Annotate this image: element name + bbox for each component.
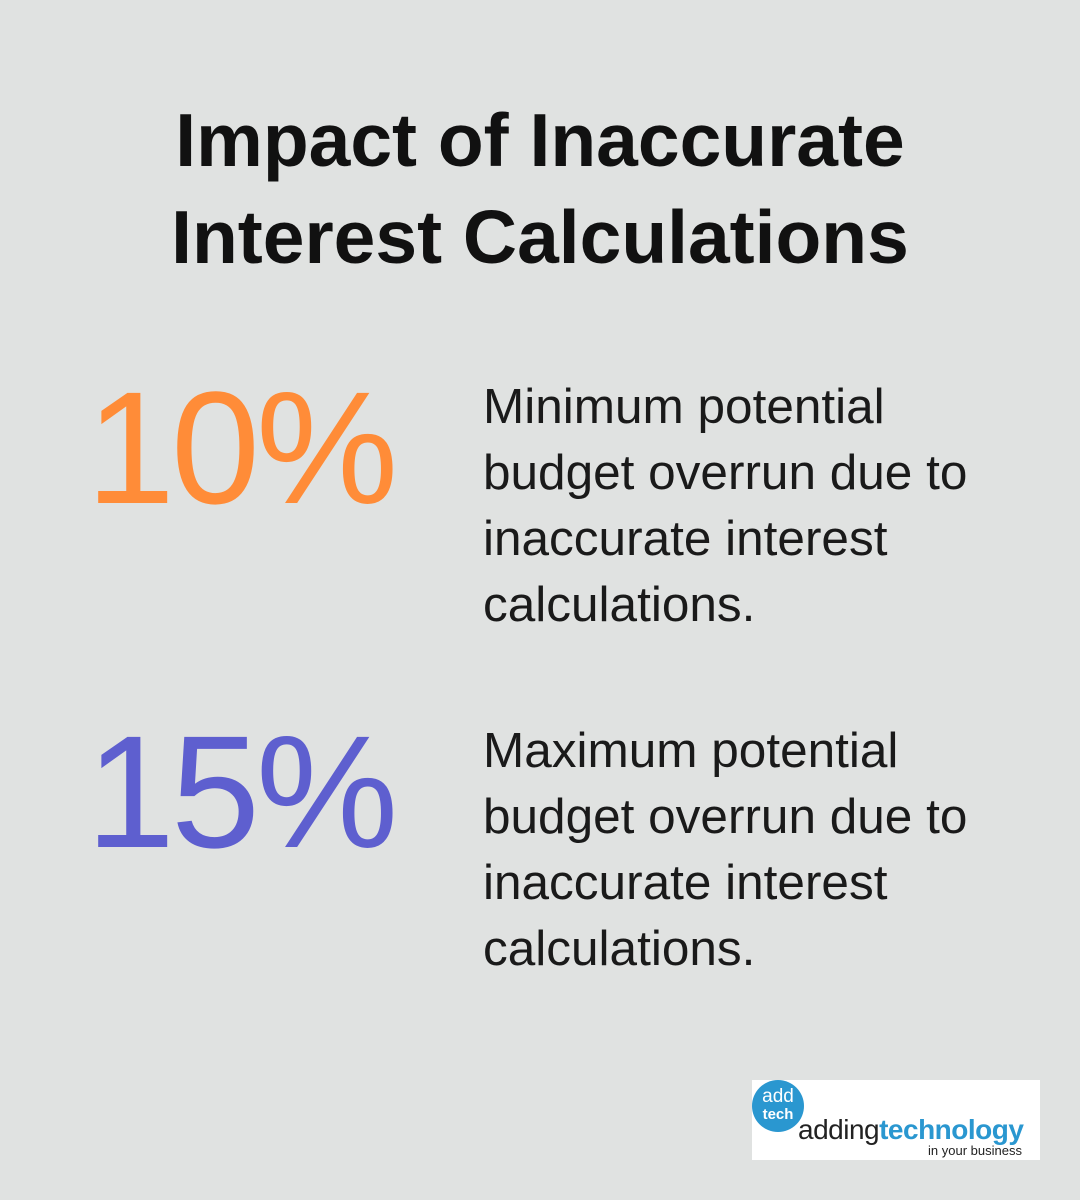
icon: addtech circle: tech	[763, 1106, 793, 1123]
title: Impact of Inaccurate	[175, 98, 905, 182]
text: minimum overrun	[483, 379, 967, 632]
text: maximum overrun: Maximum potential	[483, 723, 898, 778]
text: maximum overrun	[483, 723, 967, 976]
stat: 15%: 15%	[86, 702, 394, 881]
title: Interest Calculations	[171, 195, 909, 279]
stat: 10%: 10%	[86, 358, 394, 537]
text: minimum overrun: budget overrun due to	[483, 445, 967, 500]
text: minimum overrun: Minimum potential	[483, 379, 885, 434]
text: minimum overrun: calculations.	[483, 577, 755, 632]
icon: addtech circle: add	[762, 1086, 794, 1107]
text: maximum overrun: budget overrun due to	[483, 789, 967, 844]
text: minimum overrun: inaccurate interest	[483, 511, 887, 566]
text: maximum overrun: calculations.	[483, 921, 755, 976]
logo text: addingtechnology	[798, 1114, 1023, 1145]
text: maximum overrun: inaccurate interest	[483, 855, 887, 910]
title	[171, 98, 909, 279]
logo	[752, 1080, 1040, 1160]
icon: addtech circle	[752, 1080, 804, 1132]
tagline: in your business	[928, 1143, 1022, 1158]
